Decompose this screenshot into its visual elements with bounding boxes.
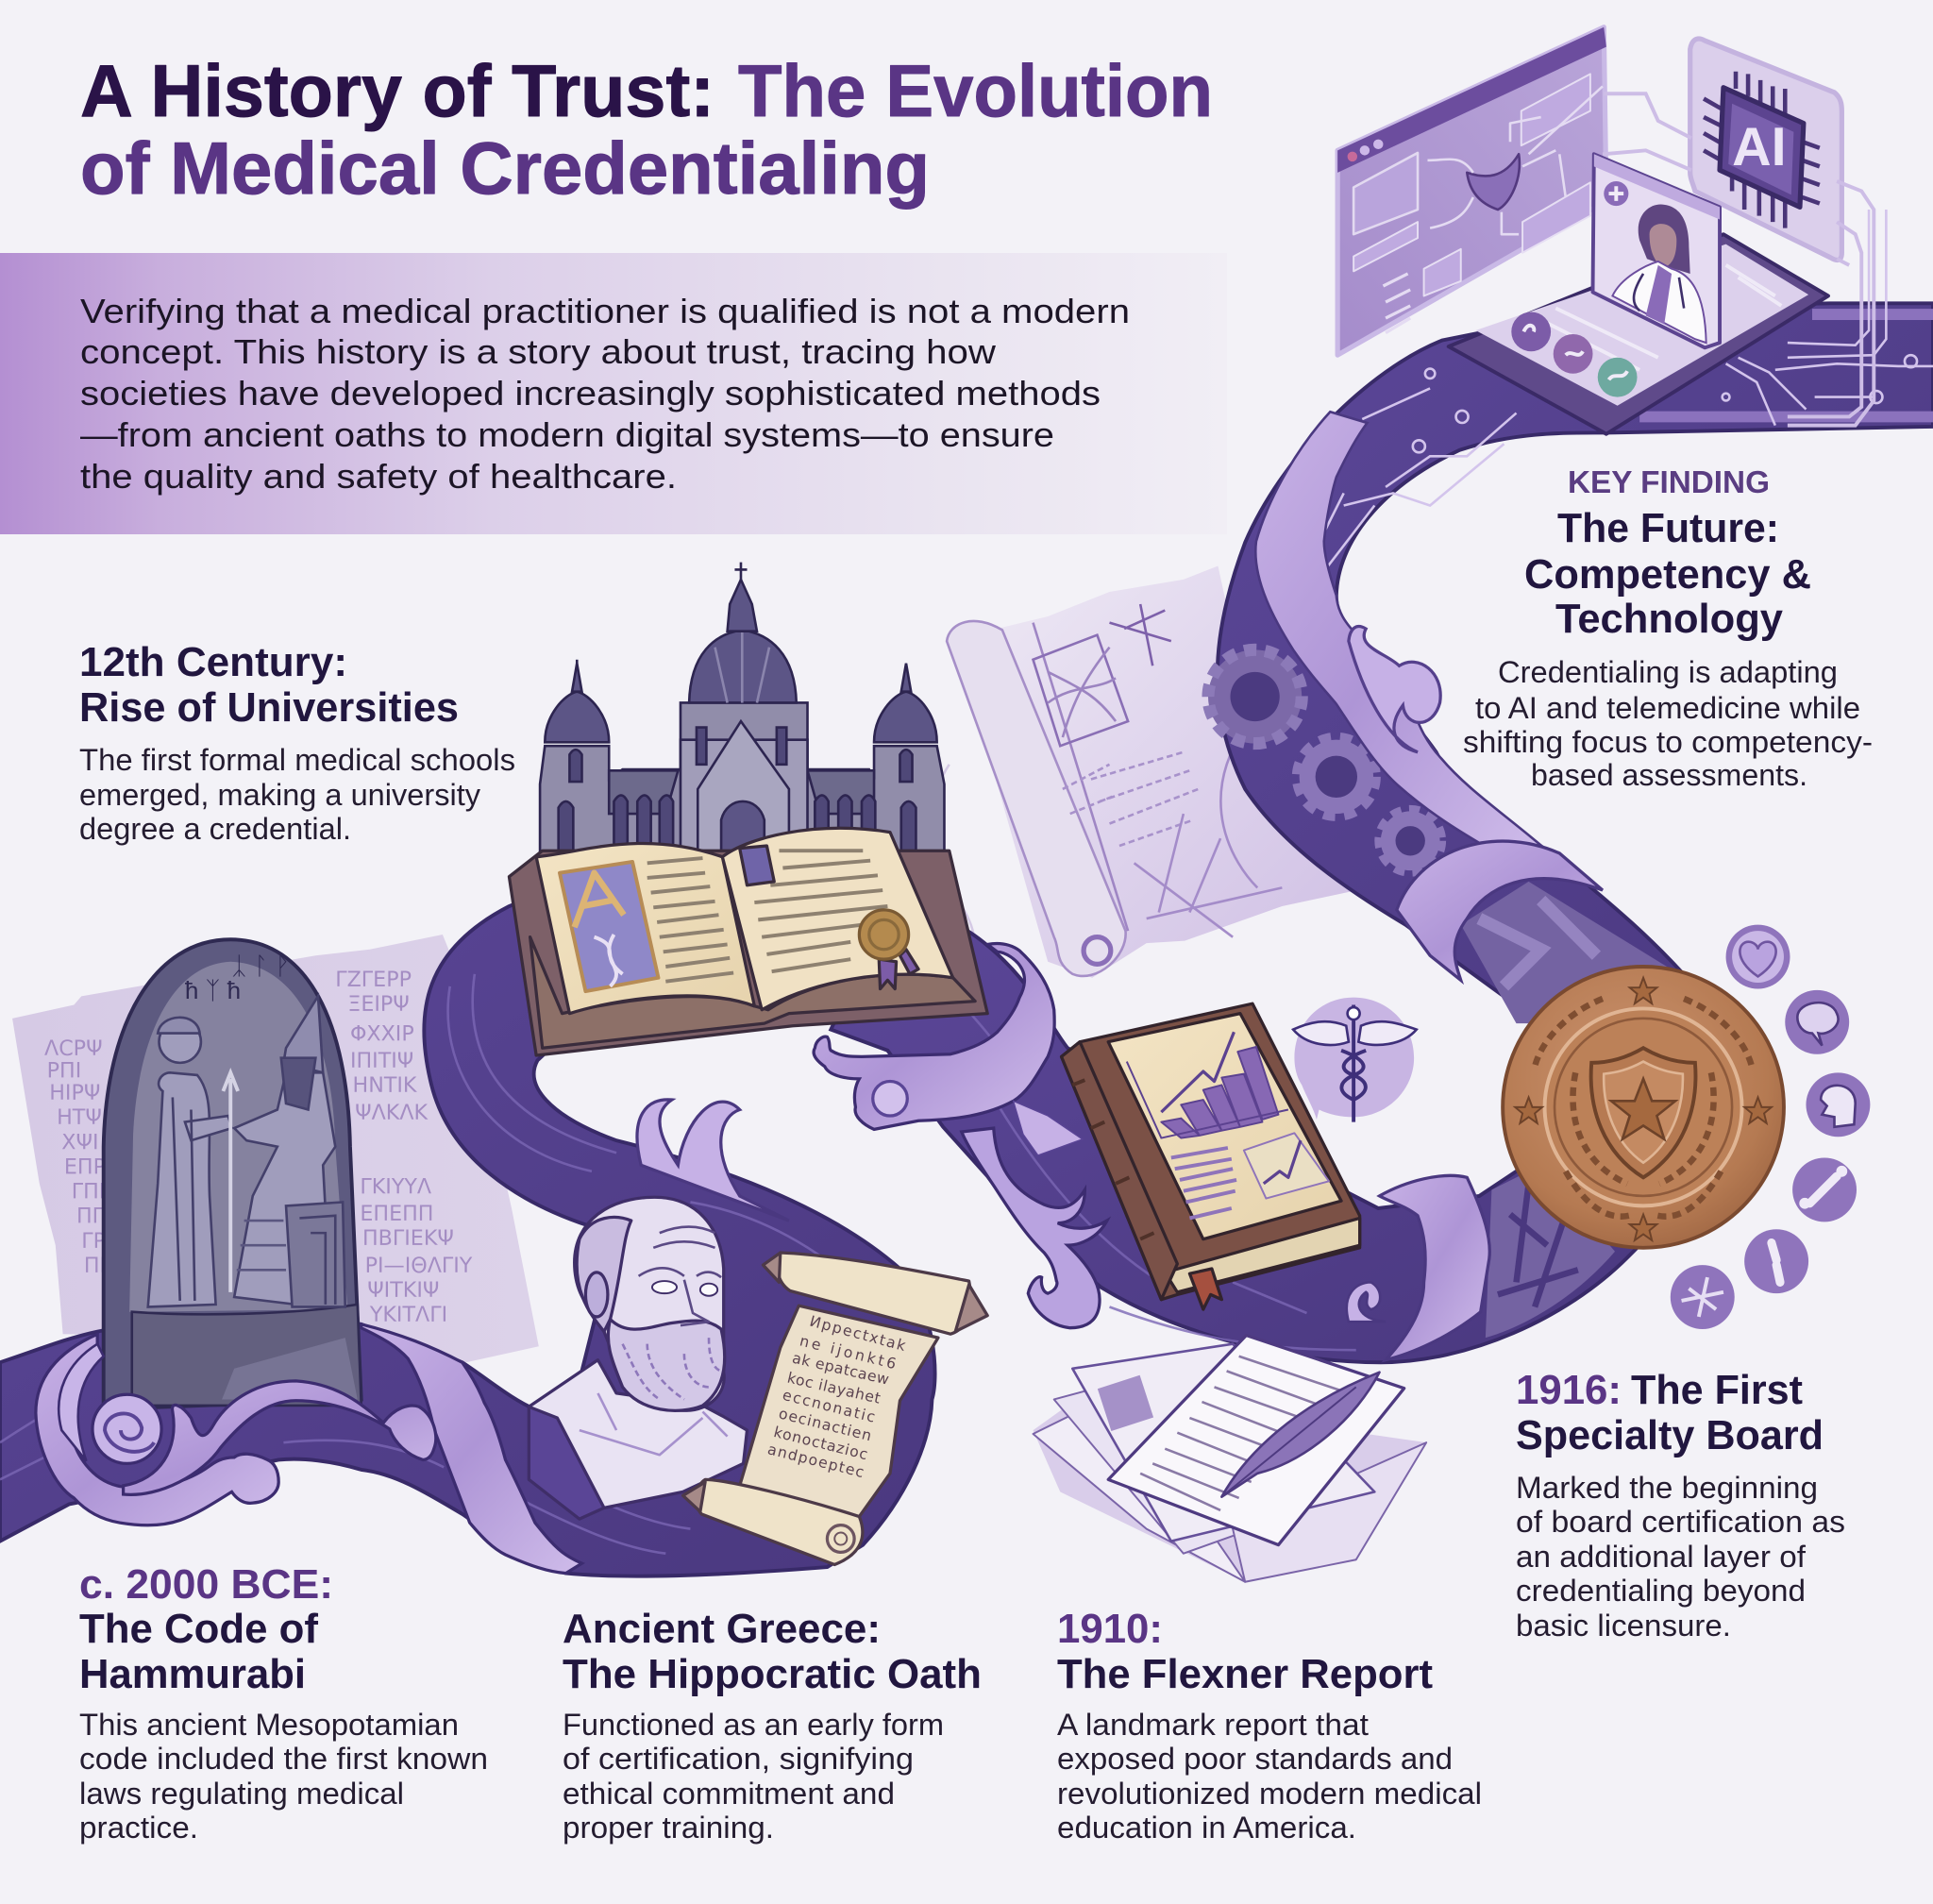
12th century: universities: The first formal medical schools (79, 743, 515, 777)
lattice pattern near medal (1486, 1165, 1615, 1338)
12th century: universities: degree a credential. (79, 812, 351, 846)
c. 2000 BCE: code of Hammurabi: c. 2000 BCE: (79, 1561, 333, 1608)
oath scroll (683, 1253, 987, 1564)
specialty icons (1671, 925, 1870, 1329)
oath scroll text: eccnonatic (781, 1386, 877, 1426)
left standing figure (148, 1018, 232, 1306)
stele inscription (185, 952, 290, 1004)
oath scroll text: konoctazioc (772, 1423, 869, 1463)
circuit panel screen (1337, 27, 1606, 355)
page text lines (647, 851, 887, 982)
ribbon wrap near medal bottom (1380, 1175, 1489, 1360)
oath scroll text: koc ilayahet (785, 1369, 882, 1407)
Hippocrates bust (529, 1197, 748, 1519)
ancient Greece: Hippocratic oath: The Hippocratic Oath (563, 1651, 982, 1697)
AI chip panel (1603, 39, 1874, 426)
AI chip panel: AI (1732, 117, 1787, 177)
spiral under stele (92, 1394, 161, 1463)
intro text: Verifying that a medical practitioner is qualified is not a modern (80, 292, 1130, 330)
circuit lines on upper ribbon (1313, 210, 1933, 585)
1916: first specialty board: an additional layer of (1516, 1540, 1806, 1574)
papyrus with cuneiform text: ΕΠΕΠΠ (360, 1202, 433, 1226)
intro text: —from ancient oaths to modern digital systems—to ensure (80, 415, 1054, 454)
ancient Greece: Hippocratic oath: ethical commitment and (563, 1777, 895, 1811)
doctor video card (1593, 154, 1720, 347)
key finding: the future: The Future: (1557, 505, 1779, 551)
icon: heart (1726, 925, 1790, 989)
key finding: the future (1463, 464, 1873, 792)
c. 2000 BCE: code of Hammurabi: Hammurabi (79, 1651, 306, 1697)
light band crossing right of stele (361, 1324, 581, 1574)
stack of papers with quill (1034, 1336, 1426, 1582)
sketch scroll with anatomical drawing (935, 566, 1357, 978)
c. 2000 BCE: code of Hammurabi (79, 1561, 488, 1845)
face details (639, 1227, 721, 1325)
papyrus with cuneiform text: ΠΒΓΙΕΚΨ (362, 1226, 454, 1251)
key finding: the future: KEY FINDING (1568, 464, 1770, 499)
oath scroll text: oecinactien (777, 1404, 873, 1444)
bronze medal (1503, 967, 1784, 1248)
1916: first specialty board: 1916: (1516, 1367, 1622, 1413)
crescent curl by stele (59, 1344, 104, 1461)
papyrus with cuneiform text: ΗΙΡΨ (49, 1081, 100, 1105)
1916: first specialty board: The First (1631, 1367, 1803, 1413)
ancient Greece: Hippocratic oath: proper training. (563, 1811, 774, 1845)
oath scroll text: ne ijonkt6 (798, 1331, 898, 1373)
ancient Greece: Hippocratic oath: Functioned as an early form (563, 1708, 944, 1742)
title: A History of Trust: (80, 49, 714, 132)
bust chest (529, 1360, 748, 1508)
ribbon texture strokes (0, 974, 1356, 1554)
icon: brain (1785, 990, 1849, 1054)
wax seal (879, 950, 918, 989)
c. 2000 BCE: code of Hammurabi: laws regulating medical (79, 1777, 404, 1811)
ancient Greece: Hippocratic oath: of certification, signifying (563, 1742, 914, 1776)
papyrus with cuneiform text: ΨΙΤΚΙΨ (367, 1278, 439, 1303)
1910: Flexner report: A landmark report that (1057, 1708, 1369, 1742)
stele of Hammurabi (104, 939, 361, 1409)
cathedral windows (559, 728, 916, 851)
caduceus bubble (1293, 998, 1417, 1122)
oath scroll text (765, 1312, 909, 1481)
ribbon: bottom left and S curve (0, 887, 935, 1576)
intro text: societies have developed increasingly sophisticated methods (80, 374, 1101, 413)
title: of Medical Credentialing (80, 126, 930, 210)
1916: first specialty board: credentialing beyond (1516, 1574, 1806, 1608)
light ribbon sweep on upper curve (1255, 412, 1546, 850)
papyrus with cuneiform text: ΙΠΙΤΙΨ (350, 1049, 413, 1073)
c. 2000 BCE: code of Hammurabi: code included the first known (79, 1742, 488, 1776)
ribbon: upper segment (1218, 303, 1933, 1023)
papyrus with cuneiform text: ΞΕΙΡΨ (347, 992, 410, 1017)
intro band (0, 253, 1227, 534)
tail curl left of report book (962, 1128, 1107, 1328)
papyrus with cuneiform text: ΦΧΧΙΡ (350, 1021, 414, 1046)
papyrus with cuneiform text: ΧΨΙ (61, 1130, 99, 1154)
arrow staff (223, 1072, 238, 1292)
S wave under stele (124, 1381, 436, 1494)
seated king figure (234, 996, 345, 1306)
gears on ribbon (1208, 649, 1689, 1023)
papyrus with cuneiform text: ΠΓΡ (76, 1205, 116, 1229)
c. 2000 BCE: code of Hammurabi: This ancient Mesopotamian (79, 1708, 459, 1742)
cathedral (540, 563, 944, 887)
stele inscription: ħ ᛉ ħ (185, 976, 241, 1004)
c. 2000 BCE: code of Hammurabi: practice. (79, 1811, 198, 1845)
papyrus with cuneiform text: ΨΛΚΛΚ (355, 1101, 429, 1125)
key finding: the future: based assessments. (1531, 758, 1807, 792)
papyrus with cuneiform text: ΓΚΙΥΥΛ (360, 1174, 431, 1199)
illuminated letter (560, 862, 658, 991)
beard (608, 1320, 725, 1410)
papyrus with cuneiform text: ΠΓΡ (84, 1254, 124, 1278)
icon: head (1806, 1072, 1870, 1137)
oath scroll text: ak epatcaew (791, 1349, 891, 1389)
twin curls above ribbon (637, 1100, 789, 1221)
report book (1062, 1003, 1360, 1309)
1910: Flexner report: exposed poor standards and (1057, 1742, 1453, 1776)
oath scroll text: Ирpectxtak (808, 1312, 909, 1355)
big curl sweep under stele (36, 1334, 278, 1525)
papyrus with cuneiform text: ΗΝΤΙΚ (353, 1073, 418, 1098)
key finding: the future: Credentialing is adapting (1498, 655, 1838, 689)
1910: Flexner report: education in America. (1057, 1811, 1356, 1845)
intro text (80, 292, 1130, 496)
c. 2000 BCE: code of Hammurabi: The Code of (79, 1606, 318, 1652)
ribbon wave right of open book (814, 943, 1054, 1129)
stele inscription: ᛣ ᛚ ᚹ (232, 952, 290, 980)
papyrus with cuneiform text: ΛCΡΨ (44, 1036, 103, 1061)
oath scroll text: andpoeptec (765, 1440, 866, 1481)
title (80, 49, 1213, 210)
key finding: the future: Technology (1555, 596, 1784, 642)
1910: Flexner report (1057, 1606, 1482, 1845)
swirl on ribbon below report book (1347, 1282, 1386, 1322)
1910: Flexner report: The Flexner Report (1057, 1651, 1433, 1697)
ancient Greece: Hippocratic oath: Ancient Greece: (563, 1606, 881, 1652)
ribbon wrap near gears (1397, 841, 1603, 980)
1910: Flexner report: 1910: (1057, 1606, 1163, 1652)
ancient Greece: Hippocratic oath (563, 1606, 982, 1845)
icon: joint (1744, 1229, 1808, 1293)
papyrus with cuneiform text: ΓΖΓΕΡΡ (335, 968, 412, 992)
1916: first specialty board: Marked the beginning (1516, 1471, 1818, 1505)
papyrus with cuneiform text: ΡΙ—ΙΘΛΓΙΥ (365, 1254, 473, 1278)
curl beside future text (1349, 627, 1440, 752)
icon: bone (1792, 1157, 1857, 1222)
12th century: universities (79, 639, 515, 846)
papyrus with cuneiform text: ΓΠΡ (72, 1180, 111, 1205)
title: The Evolution (738, 49, 1213, 132)
telemedicine tablet (1449, 234, 1828, 434)
bar chart on book (1161, 1047, 1278, 1138)
12th century: universities: 12th Century: (79, 639, 347, 685)
intro text: the quality and safety of healthcare. (80, 457, 677, 496)
papyrus with cuneiform text: ΥΚΙΤΛΓΙ (369, 1303, 447, 1327)
wave swirl centre (873, 1081, 907, 1116)
papyrus with cuneiform text: ΓΡΗ (81, 1229, 122, 1254)
papyrus with cuneiform text: ΕΠΡ (64, 1154, 106, 1179)
key finding: the future: Competency & (1524, 551, 1811, 598)
1916: first specialty board: Specialty Board (1516, 1412, 1824, 1458)
intro text: concept. This history is a story about trust, tracing how (80, 332, 997, 371)
torn ribbon piece beside report book (1014, 1101, 1083, 1155)
1910: Flexner report: revolutionized modern medical (1057, 1777, 1482, 1811)
1916: first specialty board: of board certification as (1516, 1505, 1845, 1539)
papyrus with cuneiform text: ΡΠΙ (47, 1059, 81, 1084)
icon: instruments (1671, 1265, 1735, 1329)
papyrus with cuneiform text (12, 935, 539, 1362)
12th century: universities: emerged, making a university (79, 778, 480, 812)
key finding: the future: shifting focus to competency- (1463, 725, 1873, 759)
1916: first specialty board: basic licensure. (1516, 1609, 1731, 1643)
bust head (575, 1197, 724, 1410)
light trim on right straight ribbon (1639, 314, 1933, 416)
open book (509, 828, 987, 1055)
papyrus with cuneiform text: ΗΤΨ (57, 1105, 102, 1130)
12th century: universities: Rise of Universities (79, 684, 459, 731)
1916: first specialty board (1516, 1367, 1845, 1643)
key finding: the future: to AI and telemedicine while (1475, 691, 1860, 725)
ribbon: middle segment (831, 922, 1652, 1362)
